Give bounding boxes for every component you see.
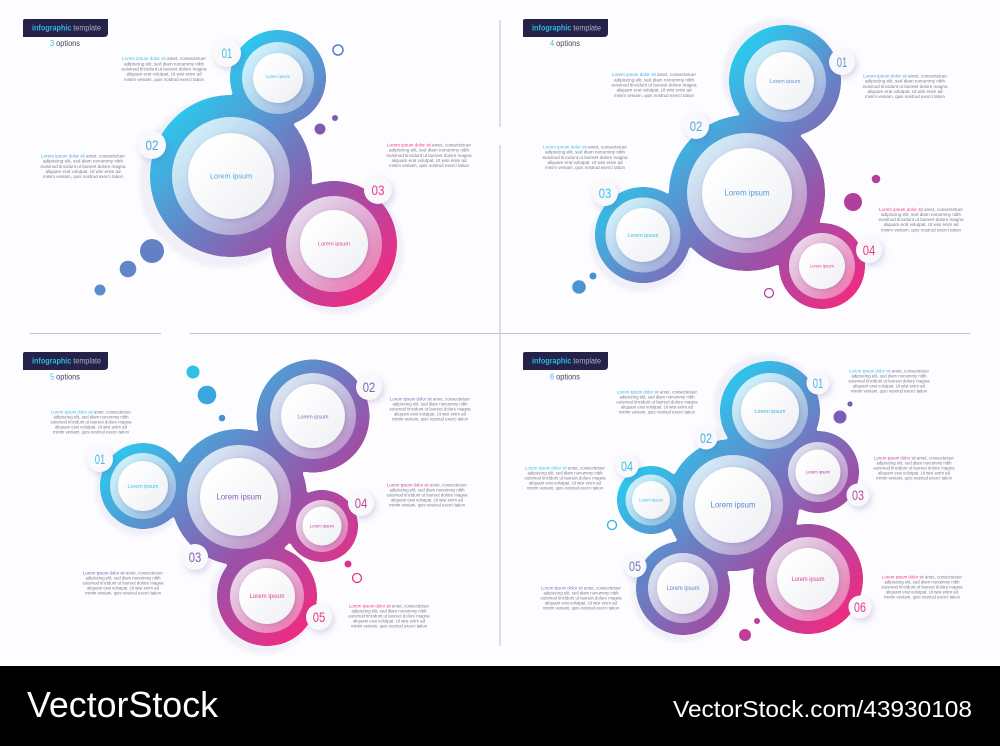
text block 05: aliquam erat volutpat. Ut wisi enim ad bbox=[353, 618, 426, 623]
footer bar bbox=[0, 666, 1000, 746]
text block 01: adipiscing elit, sed diam nonummy nibh bbox=[865, 79, 946, 84]
text block 02: aliquam erat volutpat. Ut wisi enim ad bbox=[394, 411, 467, 416]
text block 02: euismod tincidunt ut laoreet dolore magna bbox=[390, 406, 471, 411]
text block 03: euismod tincidunt ut laoreet dolore magna bbox=[874, 465, 955, 470]
panel: 6 options bbox=[523, 352, 963, 642]
text block 04: Lorem ipsum dolor sit amet, consectetuer bbox=[387, 482, 468, 488]
text block 03: adipiscing elit, sed diam nonummy nibh bbox=[86, 575, 161, 580]
text block 02: adipiscing elit, sed diam nonummy nibh bbox=[614, 77, 695, 82]
text block 03: Lorem ipsum dolor sit amet, consectetuer bbox=[387, 142, 472, 148]
circle 01 bbox=[744, 40, 826, 122]
text block 02: adipiscing elit, sed diam nonummy nibh bbox=[392, 401, 468, 406]
circle 04: Lorem ipsum bbox=[639, 498, 663, 502]
badge 03 bbox=[592, 180, 618, 206]
text block 06: Lorem ipsum dolor sit amet, consectetuer bbox=[882, 574, 963, 580]
circle 03 bbox=[286, 196, 382, 292]
text block 01: aliquam erat volutpat. Ut wisi enim ad bbox=[853, 383, 926, 388]
text block 03: adipiscing elit, sed diam nonummy nibh bbox=[389, 148, 470, 153]
text block 04: euismod tincidunt ut laoreet dolore magna bbox=[878, 217, 964, 222]
halo arcs bbox=[95, 444, 317, 654]
header badge: infographic template bbox=[532, 356, 601, 366]
text block 05: euismod tincidunt ut laoreet dolore magna bbox=[540, 595, 622, 600]
text block 04: euismod tincidunt ut laoreet dolore magna bbox=[386, 492, 468, 497]
badge 04 bbox=[616, 454, 638, 478]
badge 02 bbox=[356, 374, 382, 400]
circle 03: Lorem ipsum bbox=[216, 493, 262, 502]
circle 05 bbox=[648, 553, 718, 623]
text block 02: minim veniam, quis nostrud exerci tation bbox=[43, 174, 124, 179]
circle 05: Lorem ipsum bbox=[666, 586, 700, 592]
badge 03: 03 bbox=[189, 550, 201, 565]
text block 01: aliquam erat volutpat. Ut wisi enim ad bbox=[55, 424, 128, 429]
circle 03 bbox=[187, 445, 291, 549]
text block 01: euismod tincidunt ut laoreet dolore magna bbox=[122, 67, 207, 72]
header badge: infographic template bbox=[32, 356, 101, 366]
header badge bbox=[23, 352, 108, 382]
text block 03: minim veniam, quis nostrud exerci tation bbox=[389, 163, 470, 168]
text block 04 bbox=[386, 482, 468, 507]
badge 02: 02 bbox=[363, 380, 375, 395]
text block 04: euismod tincidunt ut laoreet dolore magna bbox=[524, 475, 606, 480]
text block 04 bbox=[524, 466, 606, 490]
circle 04 bbox=[626, 474, 676, 526]
text block 05 bbox=[540, 586, 622, 610]
circle 05 bbox=[230, 559, 304, 633]
halo arcs bbox=[590, 18, 838, 292]
badge 02 bbox=[683, 113, 709, 139]
text block 03: euismod tincidunt ut laoreet dolore magna bbox=[542, 155, 628, 160]
text block 03: Lorem ipsum dolor sit amet, consectetuer bbox=[543, 144, 628, 150]
gradient blob bbox=[150, 30, 397, 307]
text block 03: Lorem ipsum dolor sit amet, consectetuer bbox=[874, 456, 955, 460]
circle 04: Lorem ipsum bbox=[810, 264, 834, 268]
text block 02 bbox=[612, 72, 697, 98]
gradient blob bbox=[617, 361, 863, 635]
badge 02: 02 bbox=[700, 431, 712, 446]
text block 06: aliquam erat volutpat. Ut wisi enim ad bbox=[886, 589, 959, 594]
text block 05: adipiscing elit, sed diam nonummy nibh bbox=[544, 590, 619, 595]
text block 01 bbox=[848, 368, 930, 393]
circle 01: Lorem ipsum bbox=[128, 484, 159, 490]
text block 03: euismod tincidunt ut laoreet dolore magna bbox=[386, 153, 472, 158]
text block 03: adipiscing elit, sed diam nonummy nibh bbox=[876, 460, 952, 465]
text block 05: Lorem ipsum dolor sit amet, consectetuer bbox=[349, 604, 430, 608]
header badge: 6 options bbox=[550, 372, 580, 382]
badge 01 bbox=[806, 372, 830, 394]
badge 04 bbox=[856, 237, 882, 263]
text block 04: aliquam erat volutpat. Ut wisi enim ad bbox=[884, 222, 959, 227]
circle 02: Lorem ipsum bbox=[210, 172, 252, 180]
badge 05: 05 bbox=[629, 559, 641, 574]
text block 01 bbox=[862, 74, 948, 99]
text block 04: adipiscing elit, sed diam nonummy nibh bbox=[881, 212, 962, 217]
circle 06: Lorem ipsum bbox=[792, 577, 824, 583]
circle 01 bbox=[732, 373, 808, 449]
badge 05 bbox=[624, 554, 646, 578]
footer url: VectorStock.com/43930108 bbox=[673, 696, 972, 722]
text block 05: minim veniam, quis nostrud exerci tation bbox=[351, 623, 428, 628]
circle 03: Lorem ipsum bbox=[318, 242, 350, 248]
text block 01: Lorem ipsum dolor sit amet, consectetuer bbox=[863, 74, 948, 78]
badge 01 bbox=[829, 49, 855, 75]
text block 01: Lorem ipsum dolor sit amet, consectetuer bbox=[122, 56, 207, 61]
circle 06 bbox=[766, 537, 850, 621]
text block 02 bbox=[390, 396, 471, 421]
text block 05 bbox=[348, 604, 430, 628]
text block 02: minim veniam, quis nostrud exerci tation bbox=[619, 409, 696, 414]
text block 02: Lorem ipsum dolor sit amet, consectetuer bbox=[617, 390, 698, 394]
text block 02: euismod tincidunt ut laoreet dolore magna bbox=[40, 164, 126, 169]
circle 02 bbox=[687, 133, 807, 253]
circle 03 bbox=[606, 198, 680, 272]
badge 02 bbox=[694, 426, 718, 450]
badge 04: 04 bbox=[355, 496, 368, 511]
text block 01 bbox=[50, 410, 132, 434]
text block 01: adipiscing elit, sed diam nonummy nibh bbox=[54, 414, 129, 419]
text block 01: euismod tincidunt ut laoreet dolore magna bbox=[50, 419, 132, 424]
circle 04 bbox=[789, 233, 855, 299]
text block 03: minim veniam, quis nostrud exerci tation bbox=[545, 165, 626, 170]
text block 03: aliquam erat volutpat. Ut wisi enim ad bbox=[548, 160, 623, 165]
text block 06: adipiscing elit, sed diam nonummy nibh bbox=[884, 579, 960, 584]
text block 01: minim veniam, quis nostrud exerci tation bbox=[851, 388, 928, 393]
header badge bbox=[23, 19, 108, 48]
text block 01: minim veniam, quis nostrud exerci tation bbox=[53, 429, 130, 434]
text block 01: adipiscing elit, sed diam nonummy nibh bbox=[124, 61, 205, 66]
text block 03: aliquam erat volutpat. Ut wisi enim ad bbox=[392, 158, 467, 163]
text block 03 bbox=[386, 142, 472, 168]
text block 04: minim veniam, quis nostrud exerci tation bbox=[881, 227, 962, 232]
circle 02: Lorem ipsum bbox=[298, 414, 329, 420]
circle 02: Lorem ipsum bbox=[710, 501, 756, 510]
text block 02: Lorem ipsum dolor sit amet, consectetuer bbox=[390, 396, 471, 402]
badge 03 bbox=[846, 484, 870, 506]
badge 04: 04 bbox=[863, 243, 876, 258]
gradient blob bbox=[595, 25, 865, 309]
circle 01 bbox=[110, 453, 176, 519]
header badge bbox=[523, 352, 608, 382]
text block 01: aliquam erat volutpat. Ut wisi enim ad bbox=[126, 72, 202, 77]
badge 01: 01 bbox=[813, 376, 823, 391]
text block 02: aliquam erat volutpat. Ut wisi enim ad bbox=[616, 88, 692, 93]
header badge bbox=[523, 19, 608, 48]
circle 04 bbox=[296, 500, 348, 552]
badge 03 bbox=[182, 544, 208, 570]
text block 04 bbox=[878, 207, 964, 232]
circle 01: Lorem ipsum bbox=[770, 79, 801, 85]
text block 04: Lorem ipsum dolor sit amet, consectetuer bbox=[879, 207, 964, 212]
text block 05: Lorem ipsum dolor sit amet, consectetuer bbox=[541, 586, 622, 590]
text block 03 bbox=[542, 144, 628, 170]
badge 02 bbox=[138, 131, 166, 159]
text block 06: euismod tincidunt ut laoreet dolore magna bbox=[882, 584, 963, 589]
text block 03: aliquam erat volutpat. Ut wisi enim ad bbox=[878, 470, 951, 475]
badge 03: 03 bbox=[372, 183, 384, 198]
badge 01: 01 bbox=[222, 46, 232, 61]
badge 01: 01 bbox=[837, 55, 847, 70]
badge 05 bbox=[306, 604, 332, 630]
halo arcs bbox=[632, 354, 819, 642]
text block 05: aliquam erat volutpat. Ut wisi enim ad bbox=[545, 600, 618, 605]
text block 01: Lorem ipsum dolor sit amet, consectetuer bbox=[51, 410, 132, 414]
panel: 3 options bbox=[23, 19, 472, 314]
text block 05: adipiscing elit, sed diam nonummy nibh bbox=[352, 608, 427, 613]
text block 02: adipiscing elit, sed diam nonummy nibh bbox=[43, 159, 124, 164]
badge 02: 02 bbox=[146, 138, 158, 153]
header badge: infographic template bbox=[32, 24, 101, 32]
gradient blob bbox=[100, 360, 370, 646]
text block 02: minim veniam, quis nostrud exerci tation bbox=[614, 93, 695, 98]
badge 03: 03 bbox=[599, 186, 611, 201]
text block 02: aliquam erat volutpat. Ut wisi enim ad bbox=[621, 404, 694, 409]
text block 03: aliquam erat volutpat. Ut wisi enim ad bbox=[87, 585, 160, 590]
circle 01 bbox=[242, 42, 314, 114]
text block 01 bbox=[122, 56, 207, 82]
badge 05: 05 bbox=[313, 610, 325, 625]
circle 03: Lorem ipsum bbox=[806, 470, 830, 474]
text block 02 bbox=[616, 390, 698, 414]
text block 04: minim veniam, quis nostrud exerci tation bbox=[389, 502, 466, 507]
text block 02: aliquam erat volutpat. Ut wisi enim ad bbox=[46, 169, 121, 174]
circle 01: Lorem ipsum bbox=[754, 409, 786, 415]
badge 03 bbox=[364, 176, 392, 204]
text block 02 bbox=[40, 154, 126, 179]
badge 06 bbox=[848, 596, 872, 618]
decorative dots bbox=[608, 401, 853, 641]
text block 01: Lorem ipsum dolor sit amet, consectetuer bbox=[849, 368, 930, 374]
badge 02: 02 bbox=[690, 119, 702, 134]
text block 02: euismod tincidunt ut laoreet dolore magna bbox=[616, 399, 698, 404]
header badge: 5 options bbox=[50, 372, 80, 382]
header badge: 4 options bbox=[550, 38, 580, 48]
text block 03: minim veniam, quis nostrud exerci tation bbox=[876, 475, 953, 480]
text block 02: euismod tincidunt ut laoreet dolore magna bbox=[612, 82, 697, 87]
circle 01: Lorem ipsum bbox=[266, 74, 290, 79]
circle 02 bbox=[172, 117, 290, 235]
text block 04: minim veniam, quis nostrud exerci tation bbox=[527, 485, 604, 490]
badge 01 bbox=[213, 39, 241, 67]
panel: 5 options bbox=[23, 352, 471, 654]
decorative dots bbox=[186, 366, 362, 582]
text block 01: minim veniam, quis nostrud exerci tation bbox=[865, 94, 946, 99]
text block 03: minim veniam, quis nostrud exerci tation bbox=[85, 590, 162, 595]
badge 06: 06 bbox=[854, 600, 866, 615]
text block 01: euismod tincidunt ut laoreet dolore magna bbox=[848, 378, 930, 383]
text block 03: adipiscing elit, sed diam nonummy nibh bbox=[545, 150, 626, 155]
header badge: 3 options bbox=[50, 38, 80, 48]
decorative dots bbox=[572, 175, 880, 298]
badge 01 bbox=[87, 446, 113, 472]
header badge: infographic template bbox=[532, 24, 601, 32]
text block 03: euismod tincidunt ut laoreet dolore magna bbox=[82, 580, 164, 585]
text block 04: aliquam erat volutpat. Ut wisi enim ad bbox=[529, 480, 602, 485]
text block 01: euismod tincidunt ut laoreet dolore magna bbox=[862, 84, 948, 89]
circle 02 bbox=[683, 455, 783, 555]
badge 03: 03 bbox=[852, 488, 864, 503]
circle 02 bbox=[270, 373, 356, 459]
text block 02: Lorem ipsum dolor sit amet, consectetuer bbox=[41, 154, 126, 158]
text block 06: minim veniam, quis nostrud exerci tation bbox=[884, 594, 961, 599]
circle 03 bbox=[788, 442, 848, 502]
text block 04: Lorem ipsum dolor sit amet, consectetuer bbox=[525, 466, 606, 470]
text block 01: aliquam erat volutpat. Ut wisi enim ad bbox=[868, 89, 943, 94]
badge 04 bbox=[348, 490, 374, 516]
text block 03 bbox=[82, 570, 164, 595]
text block 01: adipiscing elit, sed diam nonummy nibh bbox=[852, 373, 927, 378]
text block 04: adipiscing elit, sed diam nonummy nibh bbox=[528, 470, 603, 475]
text block 02: adipiscing elit, sed diam nonummy nibh bbox=[620, 394, 695, 399]
footer logo: VectorStock bbox=[27, 684, 219, 725]
circle 02: Lorem ipsum bbox=[724, 189, 770, 198]
text block 03: Lorem ipsum dolor sit amet, consectetuer bbox=[83, 570, 164, 576]
text block 05: euismod tincidunt ut laoreet dolore magna bbox=[348, 613, 430, 618]
text block 06 bbox=[882, 574, 963, 599]
text block 04: aliquam erat volutpat. Ut wisi enim ad bbox=[391, 497, 464, 502]
circle 03: Lorem ipsum bbox=[628, 233, 659, 239]
text block 03 bbox=[874, 456, 955, 480]
text block 02: minim veniam, quis nostrud exerci tation bbox=[392, 416, 469, 421]
panel: 4 options bbox=[523, 18, 964, 309]
badge 04: 04 bbox=[621, 459, 633, 474]
text block 05: minim veniam, quis nostrud exerci tation bbox=[543, 605, 620, 610]
halo arcs bbox=[139, 96, 404, 314]
text block 01: minim veniam, quis nostrud exerci tation bbox=[124, 77, 205, 82]
circle 05: Lorem ipsum bbox=[250, 593, 284, 600]
text block 04: adipiscing elit, sed diam nonummy nibh bbox=[390, 487, 465, 492]
text block 02: Lorem ipsum dolor sit amet, consectetuer bbox=[612, 72, 697, 77]
badge 01: 01 bbox=[95, 452, 105, 467]
decorative dots bbox=[94, 45, 343, 296]
circle 04: Lorem ipsum bbox=[310, 524, 334, 528]
